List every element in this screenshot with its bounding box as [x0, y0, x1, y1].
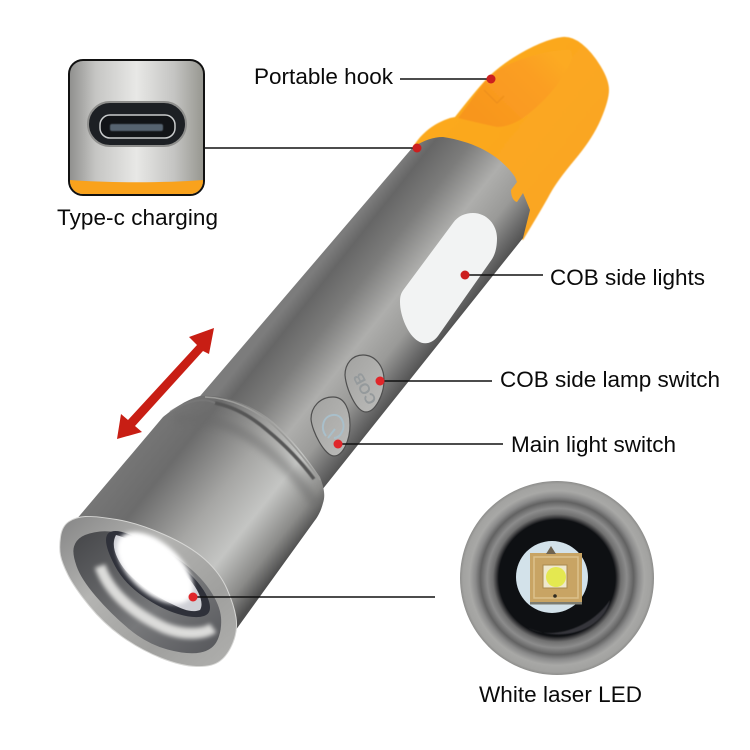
- orange hook cap: [413, 37, 609, 240]
- lens: [516, 541, 588, 613]
- leader: Type-c: [205, 144, 422, 152]
- flashlight: [60, 37, 609, 667]
- slim body: [195, 137, 530, 495]
- reflector highlight: [100, 566, 213, 633]
- label: COB side lights: COB side lights: [550, 265, 705, 290]
- leader: lens: [188, 592, 435, 602]
- ring groove: [215, 403, 314, 479]
- hook opening: [458, 50, 572, 127]
- yellow emitter: [546, 567, 566, 587]
- orange strip: [70, 180, 203, 194]
- button: main light switch: [311, 397, 350, 456]
- zoom head: [70, 396, 324, 663]
- label: Portable hook: Portable hook: [254, 64, 394, 89]
- label: Main light switch: Main light switch: [511, 432, 676, 457]
- label: White laser LED: White laser LED: [479, 682, 642, 707]
- inset: LED close-up: [460, 481, 654, 675]
- COB side light: [400, 213, 497, 343]
- gold LED chip: [530, 546, 582, 604]
- leader: hook: [400, 74, 496, 84]
- leader: side lights: [460, 270, 543, 280]
- front bezel and lens: [60, 516, 237, 667]
- inset: Type-c port: [69, 60, 204, 195]
- leader: lamp switch: [376, 376, 492, 386]
- leader: main switch: [334, 440, 503, 448]
- USB-C socket: [88, 102, 186, 146]
- button: COB switch: [345, 355, 384, 412]
- label: Type-c charging: Type-c charging: [57, 205, 218, 230]
- lens: [106, 531, 210, 617]
- double arrow: [117, 328, 214, 439]
- hook mark: [484, 90, 504, 103]
- label: COB side lamp switch: COB side lamp switch: [500, 367, 720, 392]
- button: COB switch: COB: [350, 370, 381, 407]
